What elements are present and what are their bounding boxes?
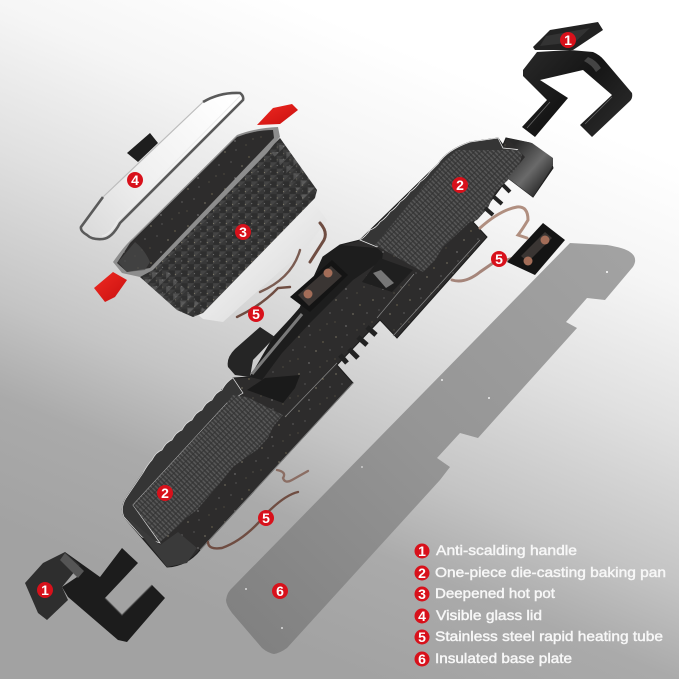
- pot body: [140, 138, 317, 317]
- panel: visible glass lid: [81, 93, 243, 239]
- black well: [250, 245, 383, 380]
- tube around pot: [310, 223, 325, 262]
- lower pan end cap: [126, 516, 197, 567]
- red pot handles: [257, 104, 298, 125]
- legend: [414, 542, 666, 667]
- legend item 4: Visible glass lid: [436, 607, 542, 623]
- legend item 3: Deepened hot pot: [435, 585, 555, 601]
- badge: 1 lower: [37, 582, 53, 598]
- badge: 3: [235, 224, 251, 240]
- badge: 3: 3: [239, 224, 247, 240]
- legend item 5: 5: [418, 629, 426, 645]
- center terminal block: [290, 260, 348, 312]
- legend item 6: Insulated base plate: [435, 650, 572, 666]
- panel: heating tubes: [208, 207, 528, 548]
- side handle: [228, 327, 275, 377]
- upper bump: [362, 258, 413, 292]
- panel: central socket and side handle: [228, 245, 413, 403]
- lid knob: [127, 133, 158, 162]
- pot interior: [117, 130, 274, 272]
- badge: 2 lower: 2: [161, 485, 169, 501]
- badge: 2 upper: [452, 177, 468, 193]
- strip highlight lines: [200, 240, 480, 550]
- upper side teeth: [485, 185, 510, 215]
- upper pan dark rim: [360, 138, 523, 247]
- panel: hot pot: [94, 104, 327, 322]
- badge: 6: [272, 583, 288, 599]
- badge: 1 lower: 1: [41, 582, 49, 598]
- badge: 2 lower: [157, 485, 173, 501]
- badge: 1 top: 1: [564, 32, 572, 48]
- tube lower: [277, 470, 308, 482]
- tube upper right: [480, 207, 528, 238]
- legend item 3: 3: [418, 586, 426, 602]
- legend item 5: Stainless steel rapid heating tube: [435, 628, 663, 644]
- legend item 2: 2: [418, 565, 426, 581]
- badge: 5 right: [491, 251, 507, 267]
- panel: top anti-scalding handle: [522, 22, 632, 137]
- badge: 2 upper: 2: [456, 177, 464, 193]
- legend item 6: 6: [418, 651, 426, 667]
- badge: 1 top: [560, 32, 576, 48]
- lower pan grill surface: [133, 395, 283, 542]
- legend item 2: One-piece die-casting baking pan: [435, 564, 666, 580]
- panel: right terminal block: [507, 223, 565, 275]
- badge: 6: 6: [276, 583, 284, 599]
- panel: lower anti-scalding handle: [25, 548, 165, 642]
- badge: 5 center: [248, 306, 264, 322]
- upper pan end cap: [507, 138, 553, 197]
- badge: 5 center: 5: [252, 306, 260, 322]
- badge: 4: [127, 172, 143, 188]
- lower bump: [247, 375, 300, 403]
- badge: 5 right: 5: [495, 251, 503, 267]
- badge: 5 lower: [258, 510, 274, 526]
- legend item 1: 1: [418, 543, 426, 559]
- lid rim: [81, 93, 243, 239]
- pot rim: [113, 127, 280, 277]
- legend item 4: 4: [418, 608, 426, 624]
- grill teeth: [340, 327, 376, 363]
- upper pan grill surface: [375, 150, 523, 272]
- badge: 5 lower: 5: [262, 510, 270, 526]
- legend item 1: Anti-scalding handle: [436, 542, 577, 558]
- panel: baking pan silhouette: [122, 138, 553, 567]
- lower pan dark rim: [122, 378, 243, 543]
- panel: insulated base plate: [226, 243, 635, 654]
- badge: 4: 4: [131, 172, 139, 188]
- handle rail: [252, 314, 302, 374]
- pot white base: [195, 205, 327, 322]
